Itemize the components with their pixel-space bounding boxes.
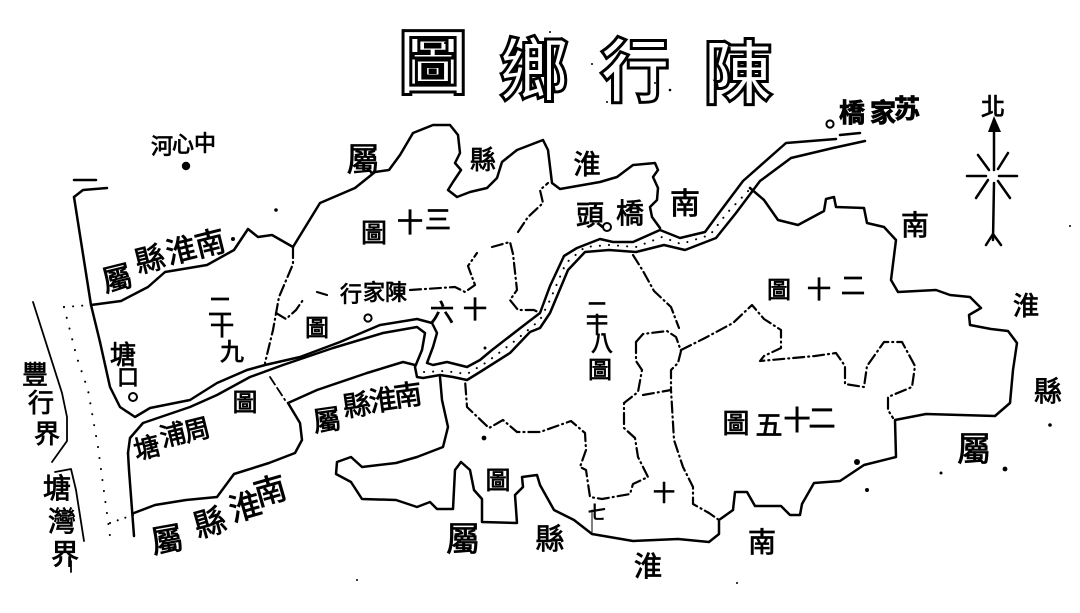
label: south Nanhui county: 南 bbox=[748, 527, 776, 558]
label: district 30 bbox=[361, 205, 451, 248]
label: Tangkou: 口 bbox=[117, 365, 139, 390]
label: Nanhui county northwest: 縣 bbox=[132, 241, 169, 280]
district boundaries: dash-dot lines bbox=[265, 183, 915, 534]
label: Fenghang boundary bbox=[22, 360, 60, 449]
label: Nanhui county northwest bbox=[99, 225, 229, 299]
title: 陳 bbox=[703, 35, 773, 113]
label: district 25: 五 bbox=[756, 411, 782, 441]
label: Suqiao village bbox=[839, 94, 920, 128]
label: district 28: 圖 bbox=[588, 357, 612, 384]
label: Tangwan boundary bbox=[43, 473, 79, 570]
label: Fenghang boundary: 豐 bbox=[22, 360, 48, 390]
label: Fenghang boundary: 行 bbox=[28, 388, 54, 418]
label: Zhongxinhe: 心 bbox=[172, 132, 194, 157]
label: Nanhui county enclave centre: 淮 bbox=[367, 383, 399, 418]
label: Zhoupu-tang bbox=[131, 389, 258, 466]
label: Nanhui county northwest: 屬 bbox=[99, 260, 136, 299]
label: Tangwan boundary: 灣 bbox=[48, 506, 76, 537]
label: south Nanhui county: 屬 bbox=[446, 521, 480, 559]
label: Zhongxinhe: 中 bbox=[194, 131, 216, 156]
label: district 26: 圖 bbox=[305, 315, 329, 342]
north boundary of Chenhang bbox=[74, 125, 660, 342]
label: south Nanhui county: 縣 bbox=[535, 523, 565, 556]
label: Nanhui county enclave centre: 南 bbox=[392, 378, 424, 413]
label: south Nanhui county bbox=[446, 521, 776, 582]
label: district 28 bbox=[586, 298, 613, 384]
label: north Nanhui county: 南 bbox=[670, 188, 700, 221]
label: district 20 bbox=[767, 273, 865, 304]
title: 鄉 bbox=[499, 32, 569, 110]
label: Nanhui county southwest: 淮 bbox=[225, 485, 266, 529]
label: Qiaotou bbox=[576, 198, 644, 231]
label: district 25: 二 bbox=[808, 404, 836, 434]
label: Zhongxinhe: 河 bbox=[151, 134, 173, 159]
label: district 25 bbox=[722, 404, 836, 441]
label: Qiaotou: 橋 bbox=[616, 198, 644, 229]
label: north Nanhui county: 屬 bbox=[346, 141, 380, 178]
label: Nanhui county southwest: 南 bbox=[250, 469, 291, 513]
label: district 27: 十 bbox=[653, 481, 675, 506]
label: Nanhui county enclave centre: 縣 bbox=[341, 388, 373, 423]
label: Nanhui county southwest bbox=[148, 469, 291, 560]
label: district 26 bbox=[305, 297, 487, 342]
title: 行 bbox=[600, 33, 670, 111]
label: district 29 bbox=[208, 294, 244, 366]
label: district 25: 圖 bbox=[722, 409, 750, 439]
label: east Nanhui county bbox=[901, 210, 1062, 469]
label: district 20: 十 bbox=[807, 277, 831, 304]
label: east Nanhui county: 屬 bbox=[957, 431, 991, 469]
label: north Nanhui county bbox=[346, 141, 700, 221]
label: Zhoupu-tang: 圖 bbox=[232, 389, 258, 417]
label: district 29: 二 bbox=[208, 294, 232, 321]
south boundary of Chenhang bbox=[336, 188, 1017, 542]
label: Chenhang: 陳 bbox=[385, 280, 407, 305]
label: Tangkou: 塘 bbox=[110, 340, 136, 370]
label: district 28: 二 bbox=[586, 298, 608, 323]
label: Zhoupu-tang: 浦 bbox=[157, 417, 189, 453]
label: Chenhang bbox=[340, 280, 407, 307]
label: district 27: 七 bbox=[588, 503, 606, 523]
label: Nanhui county enclave centre bbox=[311, 378, 424, 438]
place marker circles bbox=[129, 120, 834, 401]
label: district 30: 圖 bbox=[361, 218, 387, 248]
title: 圖 bbox=[398, 25, 468, 103]
label: district 27 bbox=[485, 467, 675, 523]
label: Chenhang: 家 bbox=[363, 280, 385, 305]
label: Zhongxinhe bbox=[151, 131, 216, 159]
label: Zhoupu-tang: 塘 bbox=[131, 430, 163, 466]
label: north Nanhui county: 淮 bbox=[574, 150, 600, 180]
label: district 26: 六 bbox=[430, 300, 454, 327]
label: Tangwan boundary: 界 bbox=[51, 539, 79, 570]
label: district 27: 圖 bbox=[485, 467, 511, 495]
label: Qiaotou: 頭 bbox=[576, 200, 604, 231]
label: Nanhui county northwest: 南 bbox=[192, 225, 229, 264]
label: district 28: 十 bbox=[586, 313, 608, 338]
label: Suqiao village: 苏 bbox=[894, 94, 920, 124]
label: Nanhui county enclave centre: 屬 bbox=[311, 403, 343, 438]
label: Chenhang: 行 bbox=[340, 282, 362, 307]
Zhoupu-tang enclave boundary bbox=[128, 362, 415, 536]
label: district 25: 十 bbox=[784, 406, 810, 436]
label: east Nanhui county: 淮 bbox=[1013, 291, 1039, 321]
label: east Nanhui county: 南 bbox=[901, 210, 929, 241]
label: district 20: 圖 bbox=[767, 277, 791, 304]
label: Tangkou bbox=[110, 340, 139, 390]
label: Tangwan boundary: 塘 bbox=[43, 473, 71, 504]
label: south Nanhui county: 淮 bbox=[634, 551, 662, 582]
label: Nanhui county northwest: 淮 bbox=[163, 232, 200, 271]
compass: north arrow: 北 bbox=[981, 94, 1005, 121]
label: district 26: 十 bbox=[463, 297, 487, 324]
label: north Nanhui county: 縣 bbox=[470, 145, 496, 175]
label: district 28: 八 bbox=[591, 331, 613, 356]
label: Suqiao village: 橋 bbox=[839, 98, 865, 128]
label: Nanhui county southwest: 縣 bbox=[190, 501, 231, 545]
river: main channel banks bbox=[100, 133, 865, 453]
label: east Nanhui county: 縣 bbox=[1034, 376, 1062, 407]
label: Fenghang boundary: 界 bbox=[34, 419, 60, 449]
label: district 29: 九 bbox=[220, 339, 244, 366]
label: district 30: 三 bbox=[425, 205, 451, 235]
label: Suqiao village: 家 bbox=[870, 98, 896, 128]
title bbox=[398, 25, 773, 113]
label: Zhoupu-tang: 周 bbox=[181, 412, 213, 448]
compass: north arrow bbox=[967, 94, 1017, 245]
label: district 20: 二 bbox=[841, 273, 865, 300]
county border lines at far left bbox=[33, 302, 133, 572]
label: Nanhui county southwest: 屬 bbox=[148, 519, 186, 560]
label: district 30: 十 bbox=[397, 208, 423, 238]
label: district 29: 十 bbox=[210, 314, 234, 341]
